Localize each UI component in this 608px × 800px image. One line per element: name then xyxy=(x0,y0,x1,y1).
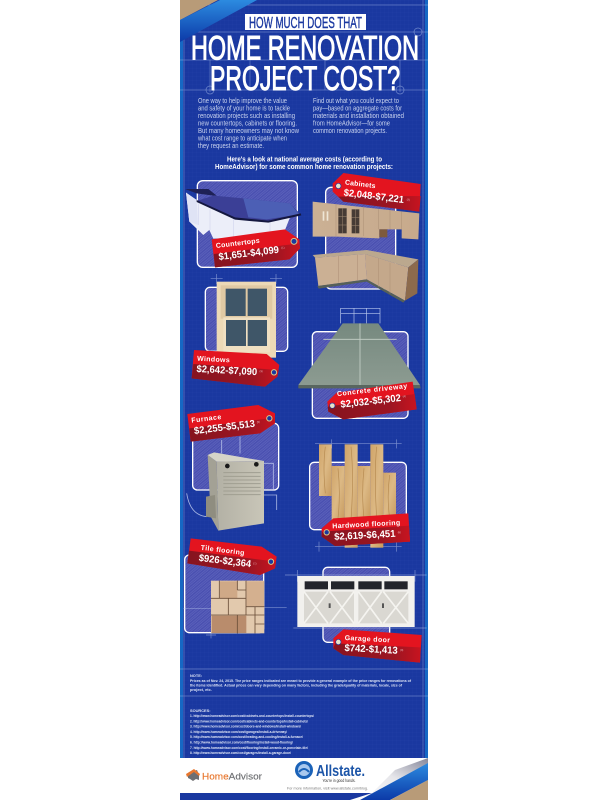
main heading line 1: HOME RENOVATION xyxy=(191,30,419,68)
upper items, coordinates in 3x units xyxy=(185,173,421,418)
bottom-right page curl xyxy=(350,758,428,800)
price tag: concrete driveway: (4) xyxy=(402,394,406,398)
panel: garage door xyxy=(285,567,427,663)
price tag: furnace: Furnace xyxy=(191,414,222,425)
cabinets backing xyxy=(326,187,396,289)
flooring backing xyxy=(310,462,406,530)
icon: driveway slab xyxy=(298,323,421,388)
icon: countertop xyxy=(185,189,301,239)
lead-in sentence: HomeAdvisor) for some common home renovation projects: xyxy=(215,162,393,171)
panel: countertops xyxy=(185,181,301,267)
sources: 7. http://www.homeadvisor.com/cost/flooring/install-ceramic-or-porcelain-tile/ xyxy=(190,745,309,750)
footer link: For more information, visit www.allstate.com/blog. xyxy=(287,786,368,790)
footer xyxy=(180,758,428,800)
price tag: garage door: $742-$1,413 xyxy=(344,643,398,657)
lead-in sentence xyxy=(215,154,393,171)
icon: ducts xyxy=(187,437,277,517)
intro text right column: Find out what you could expect to xyxy=(313,96,399,105)
panel: tile flooring xyxy=(183,538,287,638)
intro text left column: new countertops, cabinets or flooring. xyxy=(198,118,297,128)
note xyxy=(190,673,412,692)
panel: hardwood flooring xyxy=(310,439,410,552)
icon: planks xyxy=(319,444,396,548)
price tag: windows: Windows xyxy=(197,356,230,364)
lower items, coordinates in 3x units xyxy=(183,382,427,663)
sources: SOURCES: xyxy=(190,708,211,713)
windows backing xyxy=(205,287,288,351)
panel: furnace xyxy=(187,405,279,531)
icon: lower cabinets xyxy=(313,250,418,303)
note: Prices as of Nov. 24, 2015. The price ranges indicated are meant to provide a general example of the price ranges for renovations of xyxy=(190,678,412,683)
price tag: countertops: (1) xyxy=(281,245,285,250)
panel: cabinets xyxy=(313,173,421,303)
intro text right column: from HomeAdvisor—for some xyxy=(313,118,390,128)
Allstate tagline: You're in good hands. xyxy=(322,778,356,784)
subtitle box: HOW MUCH DOES THAT xyxy=(249,15,362,32)
note: project, etc. xyxy=(190,687,212,692)
note: the items identified. Actual prices can vary depending on many factors, including the grade/quality of materials, locale, size of xyxy=(190,682,403,688)
price tag: hardwood flooring: $2,619-$6,451 xyxy=(334,529,396,543)
intro text left column: and safety of your home is to tackle xyxy=(198,104,290,112)
intro text right column: pay—based on aggregate costs for xyxy=(313,104,402,112)
sources: 1. http://www.homeadvisor.com/cost/cabinets-and-countertops/install-countertops/ xyxy=(190,713,315,718)
sources: 6. http://www.homeadvisor.com/cost/flooring/install-wood-flooring/ xyxy=(190,740,294,744)
icon: Allstate hands xyxy=(295,761,313,779)
price tag: countertops xyxy=(212,229,300,267)
price tag: furnace xyxy=(187,405,275,442)
sources: 3. http://www.homeadvisor.com/cost/doors-and-windows/install-windows/ xyxy=(190,724,302,729)
panel: concrete driveway xyxy=(298,308,421,418)
HomeAdvisor logo text: HomeAdvisor xyxy=(202,772,263,782)
garage backing xyxy=(323,567,390,642)
price tag: concrete driveway: Concrete driveway xyxy=(337,383,408,398)
icon: garage outline xyxy=(341,308,380,323)
intro text right column: common renovation projects. xyxy=(313,126,387,135)
crosshair marks xyxy=(315,439,402,552)
price tag: countertops: $1,651-$4,099 xyxy=(218,245,280,263)
price tag: furnace: (5) xyxy=(256,420,260,424)
sources xyxy=(190,708,315,755)
subtitle box xyxy=(245,14,366,32)
sources: 4. http://www.homeadvisor.com/cost/garages/install-a-driveway/ xyxy=(190,729,288,734)
price tag: concrete driveway: $2,032-$5,302 xyxy=(340,393,402,411)
price tag: windows xyxy=(192,350,279,387)
icon: window xyxy=(217,282,276,358)
price tag: garage door xyxy=(333,629,422,663)
intro text right column xyxy=(313,96,404,135)
price tag: cabinets: $2,048-$7,221 xyxy=(343,188,405,206)
intro text left column: what cost range to anticipate when xyxy=(197,134,287,142)
sources: 5. http://www.homeadvisor.com/cost/heating-and-cooling/install-a-furnace/ xyxy=(190,734,304,739)
sources: 8. http://www.homeadvisor.com/cost/garages/install-a-garage-door/ xyxy=(190,750,292,755)
blueprint background panel xyxy=(180,0,428,800)
countertop backing xyxy=(197,181,297,267)
tile backing xyxy=(185,555,264,633)
icon: garage door xyxy=(297,576,415,627)
crosshair marks xyxy=(285,570,427,628)
price tag: furnace: $2,255-$5,513 xyxy=(193,419,256,437)
crosshair marks xyxy=(183,607,287,638)
top-left corner fold xyxy=(180,0,257,42)
main heading line 2: PROJECT COST? xyxy=(210,60,400,98)
title xyxy=(191,14,419,98)
panel: windows xyxy=(192,274,288,387)
price tag: cabinets: Cabinets xyxy=(344,179,376,190)
price tag: concrete driveway xyxy=(327,382,417,419)
sources: 2. http://www.homeadvisor.com/cost/cabinets-and-countertops/install-cabinets/ xyxy=(190,718,309,723)
intro text left column: But many homeowners may not know xyxy=(198,126,300,135)
driveway backing xyxy=(312,332,408,418)
note: NOTE: xyxy=(190,673,202,678)
icon: upper cabinets xyxy=(313,202,419,239)
price tag: tile flooring xyxy=(187,538,277,575)
intro text left column: they request an estimate. xyxy=(198,141,264,150)
furnace backing xyxy=(193,423,279,490)
price tag: windows: $2,642-$7,090 xyxy=(196,364,258,378)
Allstate wordmark: Allstate. xyxy=(316,763,365,780)
price tag: tile flooring: Tile flooring xyxy=(200,545,245,557)
price tag: tile flooring: $926-$2,364 xyxy=(198,553,252,570)
price tag: countertops: Countertops xyxy=(216,238,260,250)
price tag: hardwood flooring: (6) xyxy=(398,530,401,534)
price tag: cabinets xyxy=(333,173,421,212)
lead-in sentence: Here's a look at national average costs (according to xyxy=(227,154,382,164)
price tag: garage door: Garage door xyxy=(344,635,390,644)
price tag: cabinets: (2) xyxy=(406,197,410,202)
intro text right column: materials and installation obtained xyxy=(313,111,404,120)
price tag: windows: (3) xyxy=(259,369,263,373)
icon: HomeAdvisor house xyxy=(186,769,200,781)
intro text left column: One way to help improve the value xyxy=(198,96,287,105)
price tag: hardwood flooring xyxy=(322,513,410,546)
price tag: hardwood flooring: Hardwood flooring xyxy=(332,520,400,530)
icon: furnace xyxy=(206,452,264,531)
intro text left column: renovation projects such as installing xyxy=(198,111,295,120)
crosshair marks xyxy=(211,274,282,284)
price tag: garage door: (8) xyxy=(400,648,404,652)
intro text left column xyxy=(197,96,300,150)
price tag: tile flooring: (7) xyxy=(253,561,257,566)
icon: tiles xyxy=(211,581,264,633)
